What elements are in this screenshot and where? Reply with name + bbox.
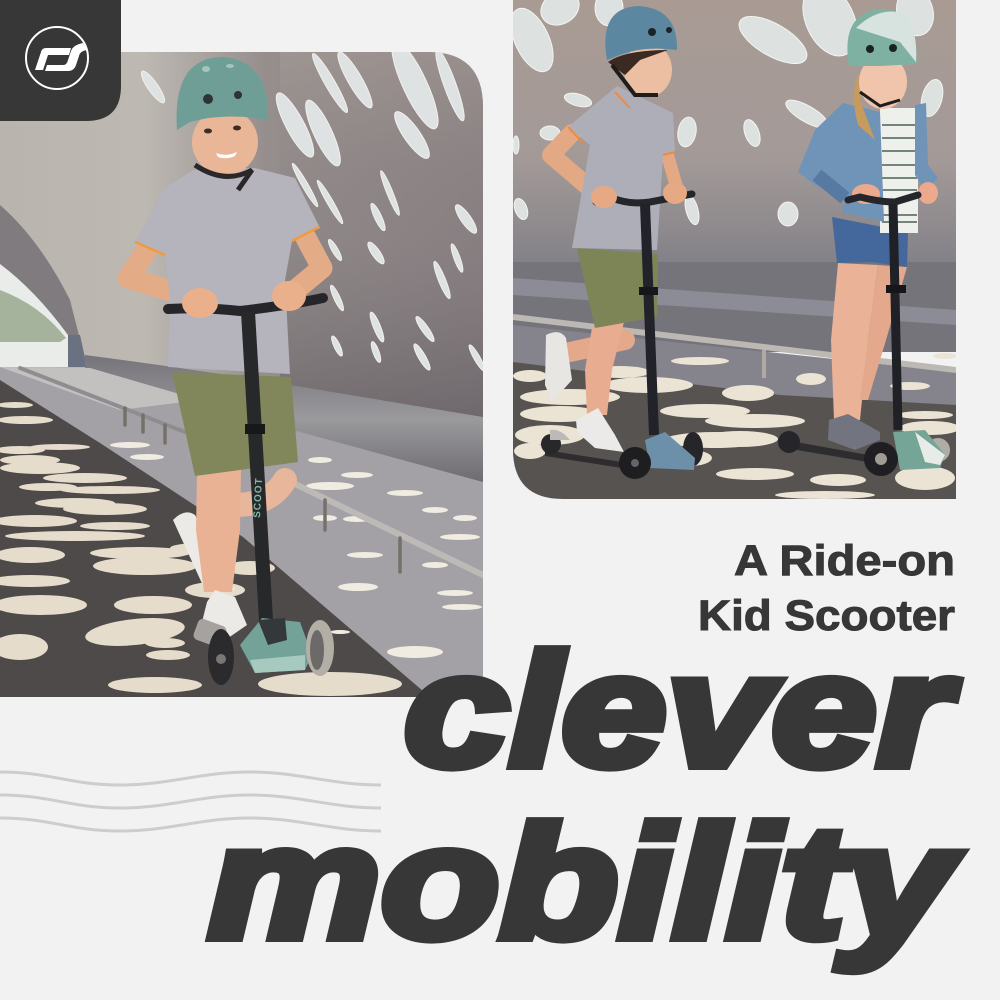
denim jacket	[798, 103, 938, 222]
metal rail	[513, 317, 956, 378]
logo mark	[26, 27, 88, 89]
shorts	[577, 248, 658, 328]
hands	[852, 182, 938, 204]
legs	[831, 263, 907, 420]
scooter deck and wheels	[778, 430, 950, 476]
subheading: A Ride-on	[734, 537, 955, 585]
handlebar	[848, 195, 918, 202]
sleeve and collar trim	[568, 92, 675, 155]
denim shorts	[832, 217, 908, 267]
back leg	[570, 340, 625, 352]
back shoe	[545, 332, 572, 402]
helmet	[177, 57, 268, 130]
stem clamp	[639, 287, 658, 295]
chin strap	[195, 165, 252, 190]
wall cut-outs	[502, 0, 947, 226]
chin strap	[612, 65, 658, 95]
scooter stem	[893, 204, 898, 430]
scooter stem	[645, 204, 654, 435]
sleeve trim	[135, 227, 319, 255]
hands	[591, 182, 687, 208]
polo shirt	[135, 168, 320, 374]
striped top	[880, 108, 918, 233]
title: clever mobility	[208, 620, 962, 972]
boy in the middle	[541, 6, 703, 479]
front leg	[585, 322, 624, 415]
panel: left photo of boy riding scooter	[0, 36, 487, 697]
subheading	[698, 537, 955, 640]
head	[192, 116, 258, 174]
chin strap	[860, 92, 900, 106]
metal railings	[20, 368, 483, 575]
logo badge	[0, 0, 121, 121]
asphalt	[513, 362, 956, 499]
back leg and shoe	[173, 480, 285, 590]
panel: right photo of two children	[502, 0, 960, 499]
front shoe	[576, 408, 624, 452]
boy on scooter	[128, 57, 334, 685]
sunlight spots	[513, 353, 960, 499]
helmet	[605, 6, 677, 60]
tunnel opening	[0, 264, 87, 367]
stem clamp	[886, 285, 906, 293]
sunlight spots on pavement	[110, 442, 482, 658]
road band behind	[513, 262, 956, 352]
subheading: Kid Scooter	[698, 592, 955, 640]
decorative wavy lines	[0, 772, 381, 831]
face features	[204, 126, 241, 158]
polo shirt	[568, 86, 675, 250]
front shoe	[202, 590, 247, 637]
wall cut-outs	[138, 36, 487, 372]
front leg	[196, 468, 241, 592]
hair	[608, 50, 668, 75]
pale hair and braid	[854, 75, 875, 140]
scooter stem: SCOOT	[252, 477, 265, 518]
helmet	[847, 9, 917, 66]
hands	[182, 281, 306, 318]
sunlight spots on asphalt	[0, 402, 402, 696]
lighter streak	[513, 278, 956, 325]
arms	[551, 133, 678, 197]
shoe	[828, 414, 880, 450]
scooter deck and wheels	[192, 618, 334, 685]
pavement	[513, 325, 956, 470]
arms	[128, 238, 322, 298]
scooter stem	[245, 312, 266, 620]
pavement	[0, 367, 483, 697]
shorts	[172, 372, 298, 476]
title: clever mobility: clever	[404, 620, 959, 800]
scooter deck and wheels	[541, 430, 703, 479]
handlebar	[168, 298, 323, 311]
handlebar	[596, 194, 692, 203]
head	[624, 43, 672, 97]
girl on the right	[778, 9, 950, 476]
wall	[513, 0, 956, 290]
wall base pipe	[85, 355, 483, 483]
title: clever mobility: mobility	[208, 792, 962, 972]
arm to handlebar	[817, 175, 845, 198]
bridge wall	[0, 52, 483, 452]
asphalt path	[0, 380, 430, 697]
head	[859, 55, 907, 109]
